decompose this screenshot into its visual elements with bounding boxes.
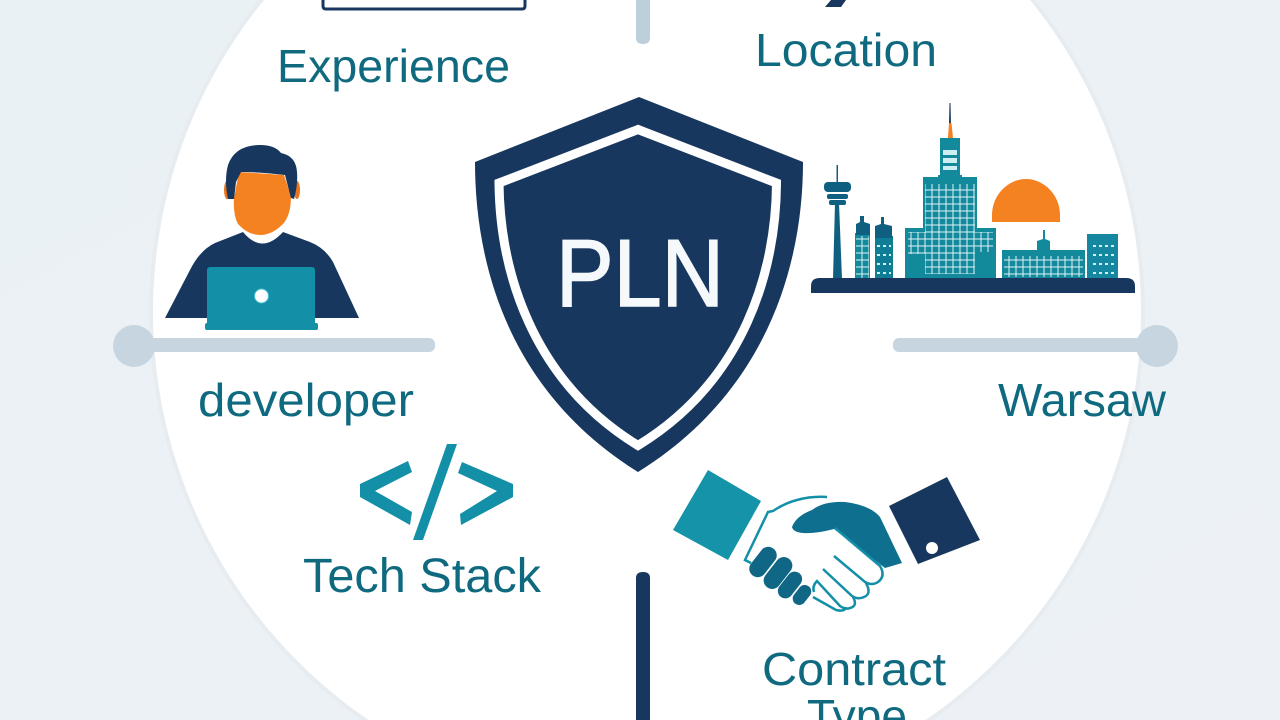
twin towers	[855, 233, 870, 279]
low hall	[1002, 230, 1085, 279]
shield label: PLN: PLN	[556, 220, 724, 327]
label: Experience: Experience	[277, 40, 510, 92]
label: Contract Type: Contract	[762, 643, 946, 695]
TV tower	[824, 165, 851, 279]
icon: handshake	[673, 470, 980, 611]
right block	[1087, 234, 1118, 279]
icon: location pin tip, cropped at top	[825, 0, 846, 7]
sun	[992, 179, 1060, 222]
panel: white central circle	[153, 0, 1141, 720]
connector: bottom	[636, 572, 650, 720]
label: Warsaw: Warsaw	[998, 374, 1167, 426]
label: Contract Type	[762, 643, 946, 720]
connector: left	[113, 325, 435, 367]
label: Location: Location	[755, 24, 937, 76]
icon: code brackets	[360, 444, 513, 540]
ground	[811, 278, 1135, 293]
connector: top	[636, 0, 650, 44]
icon: Warsaw skyline	[811, 103, 1135, 293]
palace	[905, 138, 996, 279]
label: Tech Stack: Tech Stack	[303, 550, 542, 603]
connector: right	[893, 325, 1178, 367]
icon: shield with PLN	[475, 97, 803, 472]
icon: developer with laptop	[165, 145, 359, 330]
icon: experience frame, cropped at top	[323, 0, 525, 9]
label: developer: developer	[198, 374, 414, 426]
